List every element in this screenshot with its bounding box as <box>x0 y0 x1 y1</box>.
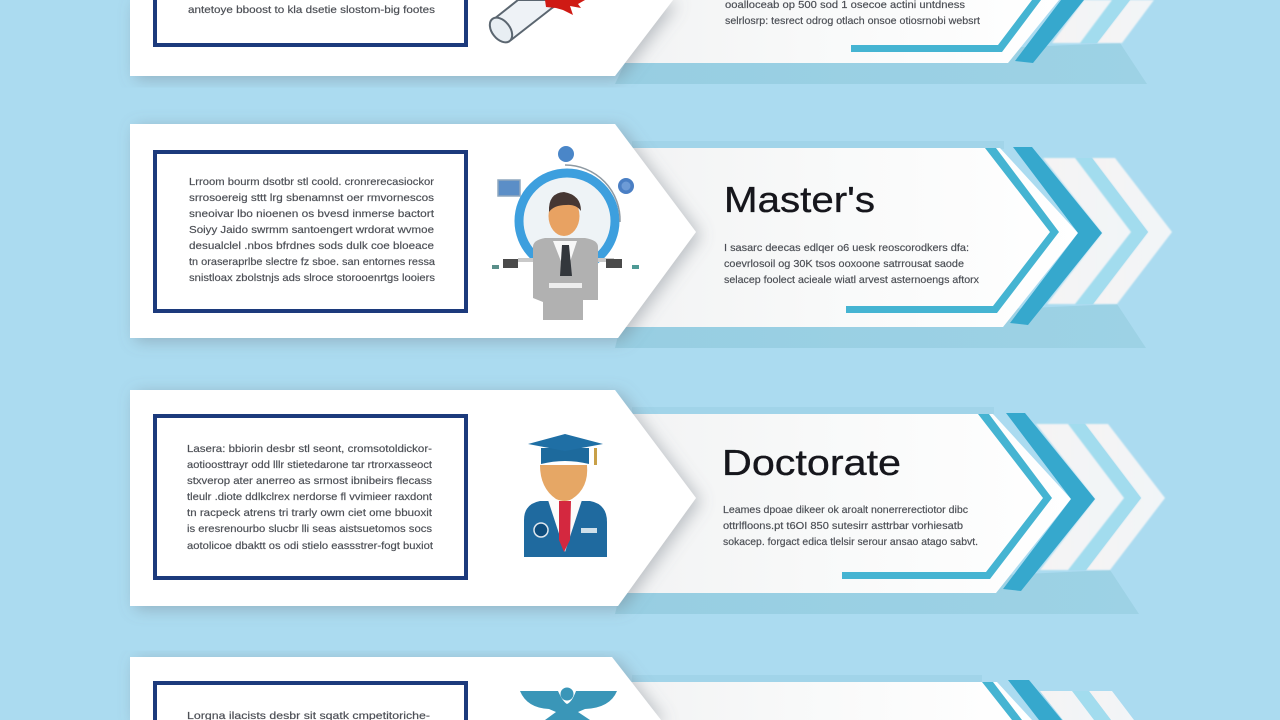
Master's body text: sneoivar lbo nioenen os bvesd inmerse bactort <box>189 208 434 220</box>
Doctorate description: sokacep. forgact edica tlelsir serour ansao atago sabvt. <box>723 536 978 548</box>
row: fourth level (cropped at bottom) <box>130 657 1134 720</box>
fourth row left panel <box>130 657 661 720</box>
Doctorate description: ottrlfloons.pt t6OI 850 sutesirr asttrbar vorhiesatb <box>723 520 963 532</box>
Bachelor's shadow band <box>615 43 1147 84</box>
Doctorate body text: is eresrenourbo slucbr lli seas aistsuetomos socs <box>187 523 432 535</box>
Master's description <box>724 242 980 286</box>
Doctorate body text: aotioosttrayr odd lllr stietedarone tar rtrorxasseoct <box>187 459 432 471</box>
Master's body text: tn oraseraprlbe slectre fz sboe. san entornes ressa <box>189 256 435 268</box>
Bachelor's body text: antetoye bboost to kla dsetie slostom-big footes <box>188 4 435 16</box>
Master's text box <box>155 152 466 311</box>
Master's left panel <box>130 124 696 338</box>
Master's arrow panel <box>600 147 1172 327</box>
Doctorate body text: Lasera: bbiorin desbr stl seont, cromsotoldickor- <box>187 443 433 455</box>
row: Bachelor's (cropped at top) <box>130 0 1154 84</box>
Master's body text: srrosoereig sttt lrg sbenamnst oer rmvornescos <box>189 192 434 204</box>
icon: doctorate graduate <box>524 434 607 557</box>
icon: diploma scroll <box>485 0 585 47</box>
Doctorate heading: Doctorate <box>722 442 901 483</box>
Master's body text <box>189 176 435 284</box>
row: Doctorate <box>130 390 1165 614</box>
Doctorate description: Leames dpoae dikeer ok aroalt nonerrerectiotor dibc <box>723 504 968 516</box>
Doctorate shadow band <box>615 570 1139 614</box>
Master's description: selacep foolect acieale wiatl arvest asternoengs aftorx <box>724 274 980 286</box>
Bachelor's text box <box>155 0 466 45</box>
icon: master's graduate in grey suit <box>492 146 639 320</box>
Doctorate top band <box>632 407 994 415</box>
Master's description: coevrlosoil og 30K tsos ooxoone satrrousat saode <box>724 258 964 270</box>
fourth row arrow panel <box>600 680 1134 720</box>
Doctorate body text: aotolicoe dbaktt os odi stielo eassstrer-fogt buxiot <box>187 540 433 552</box>
Master's heading: Master's <box>724 179 875 220</box>
fourth row top band <box>632 675 982 683</box>
Master's body text: Soiyy Jaido swrmm santoengert wrdorat wvmoe <box>189 224 434 236</box>
Master's body text: desualclel .nbos bfrdnes sods dulk coe bloeace <box>189 240 434 252</box>
Doctorate arrow panel <box>600 413 1165 593</box>
fourth row text box <box>155 683 466 720</box>
Doctorate text box <box>155 416 466 578</box>
row: Master's <box>130 124 1172 348</box>
Doctorate body text: tn racpeck atrens tri trarly owm ciet ome bbuoxit <box>187 507 432 519</box>
Doctorate body text: stxverop ater anerreo as srmost ibnibeirs flecass <box>187 475 432 487</box>
Bachelor's description <box>725 0 980 27</box>
Bachelor's left panel <box>130 0 673 76</box>
Master's body text: Lrroom bourm dsotbr stl coold. cronrerecasiockor <box>189 176 435 188</box>
Bachelor's arrow panel <box>600 0 1154 63</box>
Master's top band <box>632 141 1004 149</box>
Doctorate left panel <box>130 390 696 606</box>
Master's description: I sasarc deecas edlqer o6 uesk reoscorodkers dfa: <box>724 242 969 254</box>
Doctorate body text: tleulr .diote ddlkclrex nerdorse fl vvimieer raxdont <box>187 491 432 503</box>
icon: caduceus <box>520 688 617 720</box>
Master's shadow band <box>615 304 1146 348</box>
Bachelor's description: selrlosrp: tesrect odrog otlach onsoe otiosrnobi websrt <box>725 15 980 27</box>
Doctorate body text <box>187 443 433 552</box>
Master's body text: snistloax zbolstnjs ads slroce storooenrtgs looiers <box>189 272 435 284</box>
Doctorate description <box>723 504 978 548</box>
